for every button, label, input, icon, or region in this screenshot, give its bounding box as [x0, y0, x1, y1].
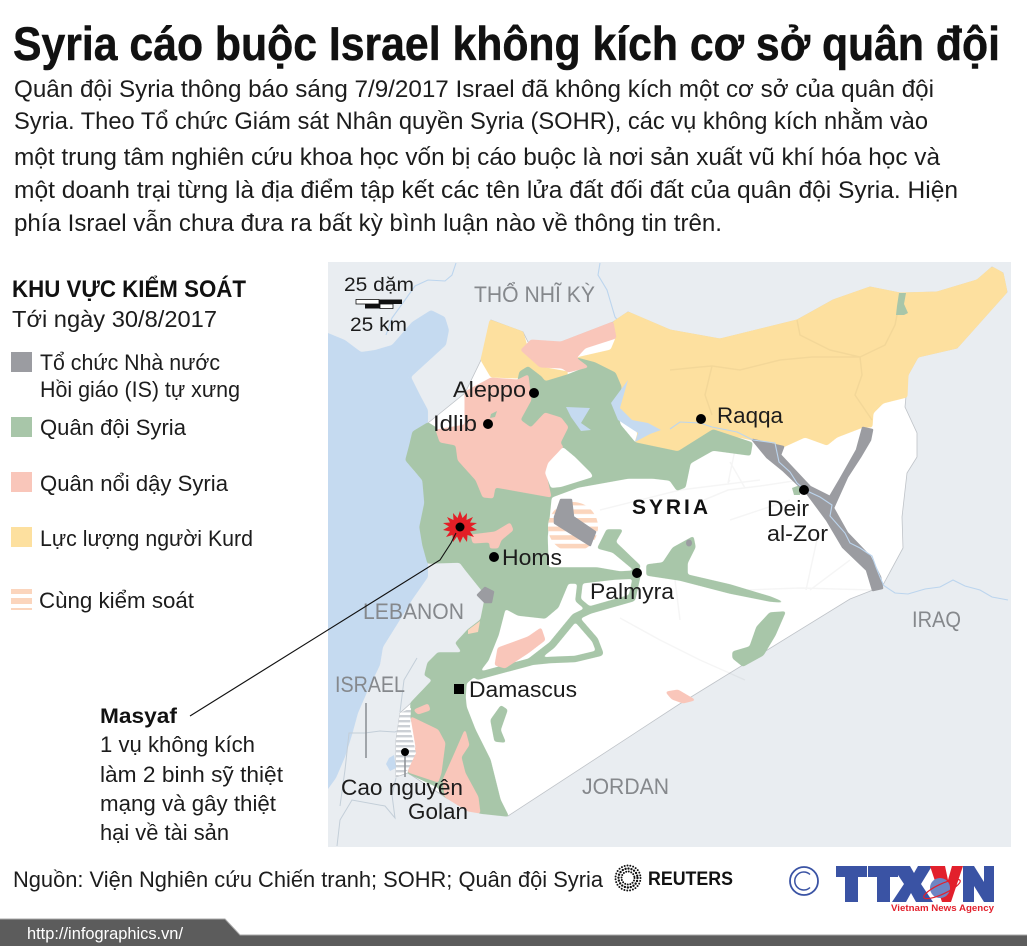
- intro text block: Syria. Theo Tổ chức Giám sát Nhân quyền Syria (SOHR), các vụ không kích nhằm vào: [14, 108, 928, 135]
- legend item: Syrian army: Quân đội Syria: [40, 415, 186, 440]
- shared control zone with IS pocket: [548, 500, 598, 552]
- Syrian army areas: [406, 358, 785, 816]
- callout: Masyaf: Masyaf: [100, 704, 178, 728]
- scale bar: [345, 276, 413, 331]
- IS pocket near Damascus: [478, 588, 493, 602]
- city labels: Damascus: [469, 677, 577, 702]
- Syria label: SYRIA: [632, 496, 708, 519]
- country labels: ISRAEL: [335, 672, 405, 697]
- legend item: IS: Hồi giáo (IS) tự xưng: [40, 377, 240, 402]
- TTXVN logo: Vietnam News Agency: [891, 903, 995, 914]
- city labels: al-Zor: [767, 521, 828, 546]
- city labels: Deir: [767, 496, 809, 521]
- callout: Masyaf: làm 2 binh sỹ thiệt: [100, 762, 283, 787]
- small IS pocket east of Palmyra: [686, 540, 692, 546]
- legend item: rebels: Quân nổi dậy Syria: [40, 471, 228, 496]
- country labels: [335, 282, 961, 799]
- lakes and Euphrates river: [566, 380, 884, 586]
- Syria territory: [396, 267, 1007, 816]
- Lake Tiberias: [386, 755, 396, 771]
- callout: Masyaf: mạng và gây thiệt: [100, 791, 276, 816]
- TTXVN logo: [836, 866, 995, 914]
- source line: Nguồn: Viện Nghiên cứu Chiến tranh; SOHR; Quân đội Syria: [13, 867, 603, 892]
- IS area along the Euphrates: [753, 428, 882, 590]
- intro text block: phía Israel vẫn chưa đưa ra bất kỳ bình luận nào về thông tin trên.: [14, 210, 722, 237]
- intro text block: một trung tâm nghiên cứu khoa học vốn bị cáo buộc là nơi sản xuất vũ khí hóa học và: [14, 144, 941, 171]
- Golan Heights hatched zone: [396, 708, 416, 777]
- callout leader line: [190, 533, 456, 716]
- city labels: Aleppo: [453, 377, 526, 402]
- icon: air strike burst: [443, 511, 477, 543]
- icon: Reuters logo: [616, 866, 733, 890]
- icon: Reuters logo: REUTERS: [648, 869, 733, 890]
- shared strip north of Damascus: [468, 621, 480, 634]
- legend item: IS: Tổ chức Nhà nước: [40, 350, 220, 375]
- intro text block: [14, 76, 958, 237]
- country labels: LEBANON: [363, 599, 464, 624]
- map of Syria: [320, 262, 1011, 847]
- city labels: Cao nguyên: [341, 775, 463, 800]
- footer bar: [0, 919, 1027, 946]
- army leaf near Idlib: [490, 411, 497, 418]
- faint roads: [600, 450, 873, 680]
- panel: legend: [11, 275, 253, 613]
- legend item: shared control: Cùng kiểm soát: [39, 588, 195, 613]
- city labels: Golan: [408, 799, 468, 824]
- Israel to Golan marker lines: [366, 703, 405, 777]
- government pocket in the north-east: [896, 293, 908, 315]
- scale bar: 25 dặm: [344, 275, 414, 296]
- callout: Masyaf: 1 vụ không kích: [100, 732, 255, 757]
- callout: Masyaf: hại về tài sản: [100, 820, 229, 845]
- scale bar: 25 km: [350, 315, 407, 336]
- rebel-held areas: [408, 322, 695, 813]
- city labels: [341, 377, 828, 824]
- country labels: JORDAN: [582, 774, 669, 799]
- small army pocket at Deir al-Zor: [792, 485, 800, 495]
- city labels: Homs: [502, 545, 562, 570]
- legend date: Tới ngày 30/8/2017: [12, 306, 217, 332]
- city labels: Palmyra: [590, 579, 675, 604]
- intro text block: một doanh trại từng là địa điểm tập kết các tên lửa đất đối đất của quân đội Syria. Hiện: [14, 177, 958, 204]
- legend heading: KHU VỰC KIỂM SOÁT: [12, 275, 246, 303]
- callout: Masyaf: [100, 704, 283, 845]
- legend item: Kurds: Lực lượng người Kurd: [40, 526, 253, 551]
- footer bar: http://infographics.vn/: [27, 924, 183, 943]
- country labels: THỔ NHĨ KỲ: [474, 282, 595, 307]
- white pocket south-east of Idlib: [545, 447, 593, 488]
- city labels: Idlib: [433, 411, 477, 436]
- country labels: IRAQ: [912, 607, 961, 632]
- Kurdish-held area: [481, 267, 1007, 452]
- legend item: IS: [11, 350, 240, 402]
- icon: copyright symbol: [790, 867, 818, 895]
- intro text block: Quân đội Syria thông báo sáng 7/9/2017 Israel đã không kích một cơ sở của quân đội: [14, 76, 934, 103]
- city labels: Raqqa: [717, 403, 784, 428]
- Mediterranean sea: [320, 310, 449, 800]
- rivers and borders outside Syria: [337, 263, 1008, 846]
- city markers: [401, 388, 809, 756]
- roads across Kurdish area: [670, 310, 898, 420]
